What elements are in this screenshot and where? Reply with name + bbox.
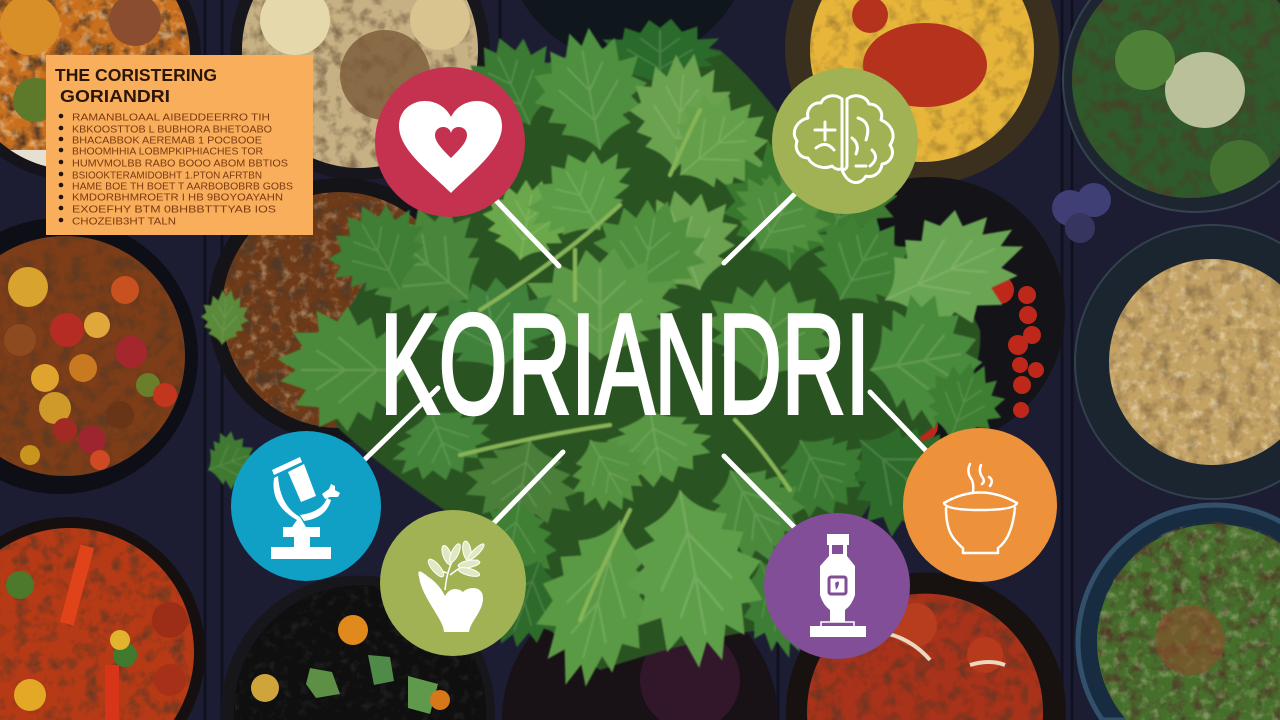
bowl: top right (1063, 0, 1280, 212)
panel heading (55, 65, 217, 106)
panel bullet list: HAME BOE TH BOET T AARBOBOBRB GOBS (72, 180, 293, 192)
icon: heart (399, 101, 502, 193)
bowl: top right-centre (785, 0, 1059, 185)
badge: microscope (231, 431, 381, 581)
badge: bottle (764, 513, 910, 659)
badge: herb in hand (380, 510, 526, 656)
bowl: left middle (0, 218, 198, 494)
panel bullet list: KBKOOSTTOB L BUBHORA BHETOABO (72, 124, 272, 136)
info panel (46, 55, 313, 235)
connector lines (357, 186, 933, 534)
panel bullets (59, 114, 63, 222)
panel heading: THE CORISTERING (55, 65, 217, 85)
bowl: bottom left (0, 517, 205, 720)
bowl: right grains (1075, 225, 1280, 499)
title: KORIANDRI: KORIANDRI (380, 285, 870, 444)
bowl: centre left (208, 178, 418, 442)
panel bullet list: HUMVMOLBB RABO BOOO ABOM BBTIOS (72, 158, 288, 170)
bowl: top centre (506, 0, 750, 62)
panel bullet list (72, 112, 293, 228)
bowl: bottom right-centre (786, 573, 1066, 720)
icon: steaming bowl (944, 464, 1017, 553)
panel bullet list: EXOEFHY BTM 0BHBBTTTYAB IOS (72, 204, 276, 216)
bowl: bottom centre (502, 582, 778, 720)
panel bullet list: BHOOMHHIA LOBMPKIPHIACHES TOR (72, 146, 263, 158)
bowl: bottom centre-left (221, 576, 495, 720)
stone (1052, 183, 1111, 243)
panel bullet list: BHACABBOK AEREMAB 1 POCBOOE (72, 134, 262, 146)
icon: hand with herbs (418, 540, 486, 632)
icon: sauce bottle (810, 534, 866, 637)
panel bullet list: KMDORBHMROETR I HB 9BOYOAYAHN (72, 192, 283, 204)
side leaves (197, 287, 267, 500)
badge: brain (772, 68, 918, 214)
bowl: bottom right (1078, 505, 1280, 720)
panel heading: GORIANDRI (60, 86, 170, 106)
bowl: centre right (795, 177, 1065, 447)
badge: soup bowl (903, 428, 1057, 582)
icon: brain (794, 96, 893, 183)
bowl: top centre-left (230, 0, 490, 180)
badge: heart (375, 67, 525, 217)
coriander leaf mass (277, 19, 1044, 702)
panel bullet list: RAMANBLOAAL AIBEDDEERRO TIH (72, 112, 270, 124)
panel bullet list: CHOZEIB3HT TALN (72, 216, 176, 228)
icon: microscope (271, 457, 340, 559)
bowl: top left (0, 0, 201, 181)
panel bullet list: BSIOOKTERAMIDOBHT 1.PTON AFRTBN (72, 170, 262, 182)
